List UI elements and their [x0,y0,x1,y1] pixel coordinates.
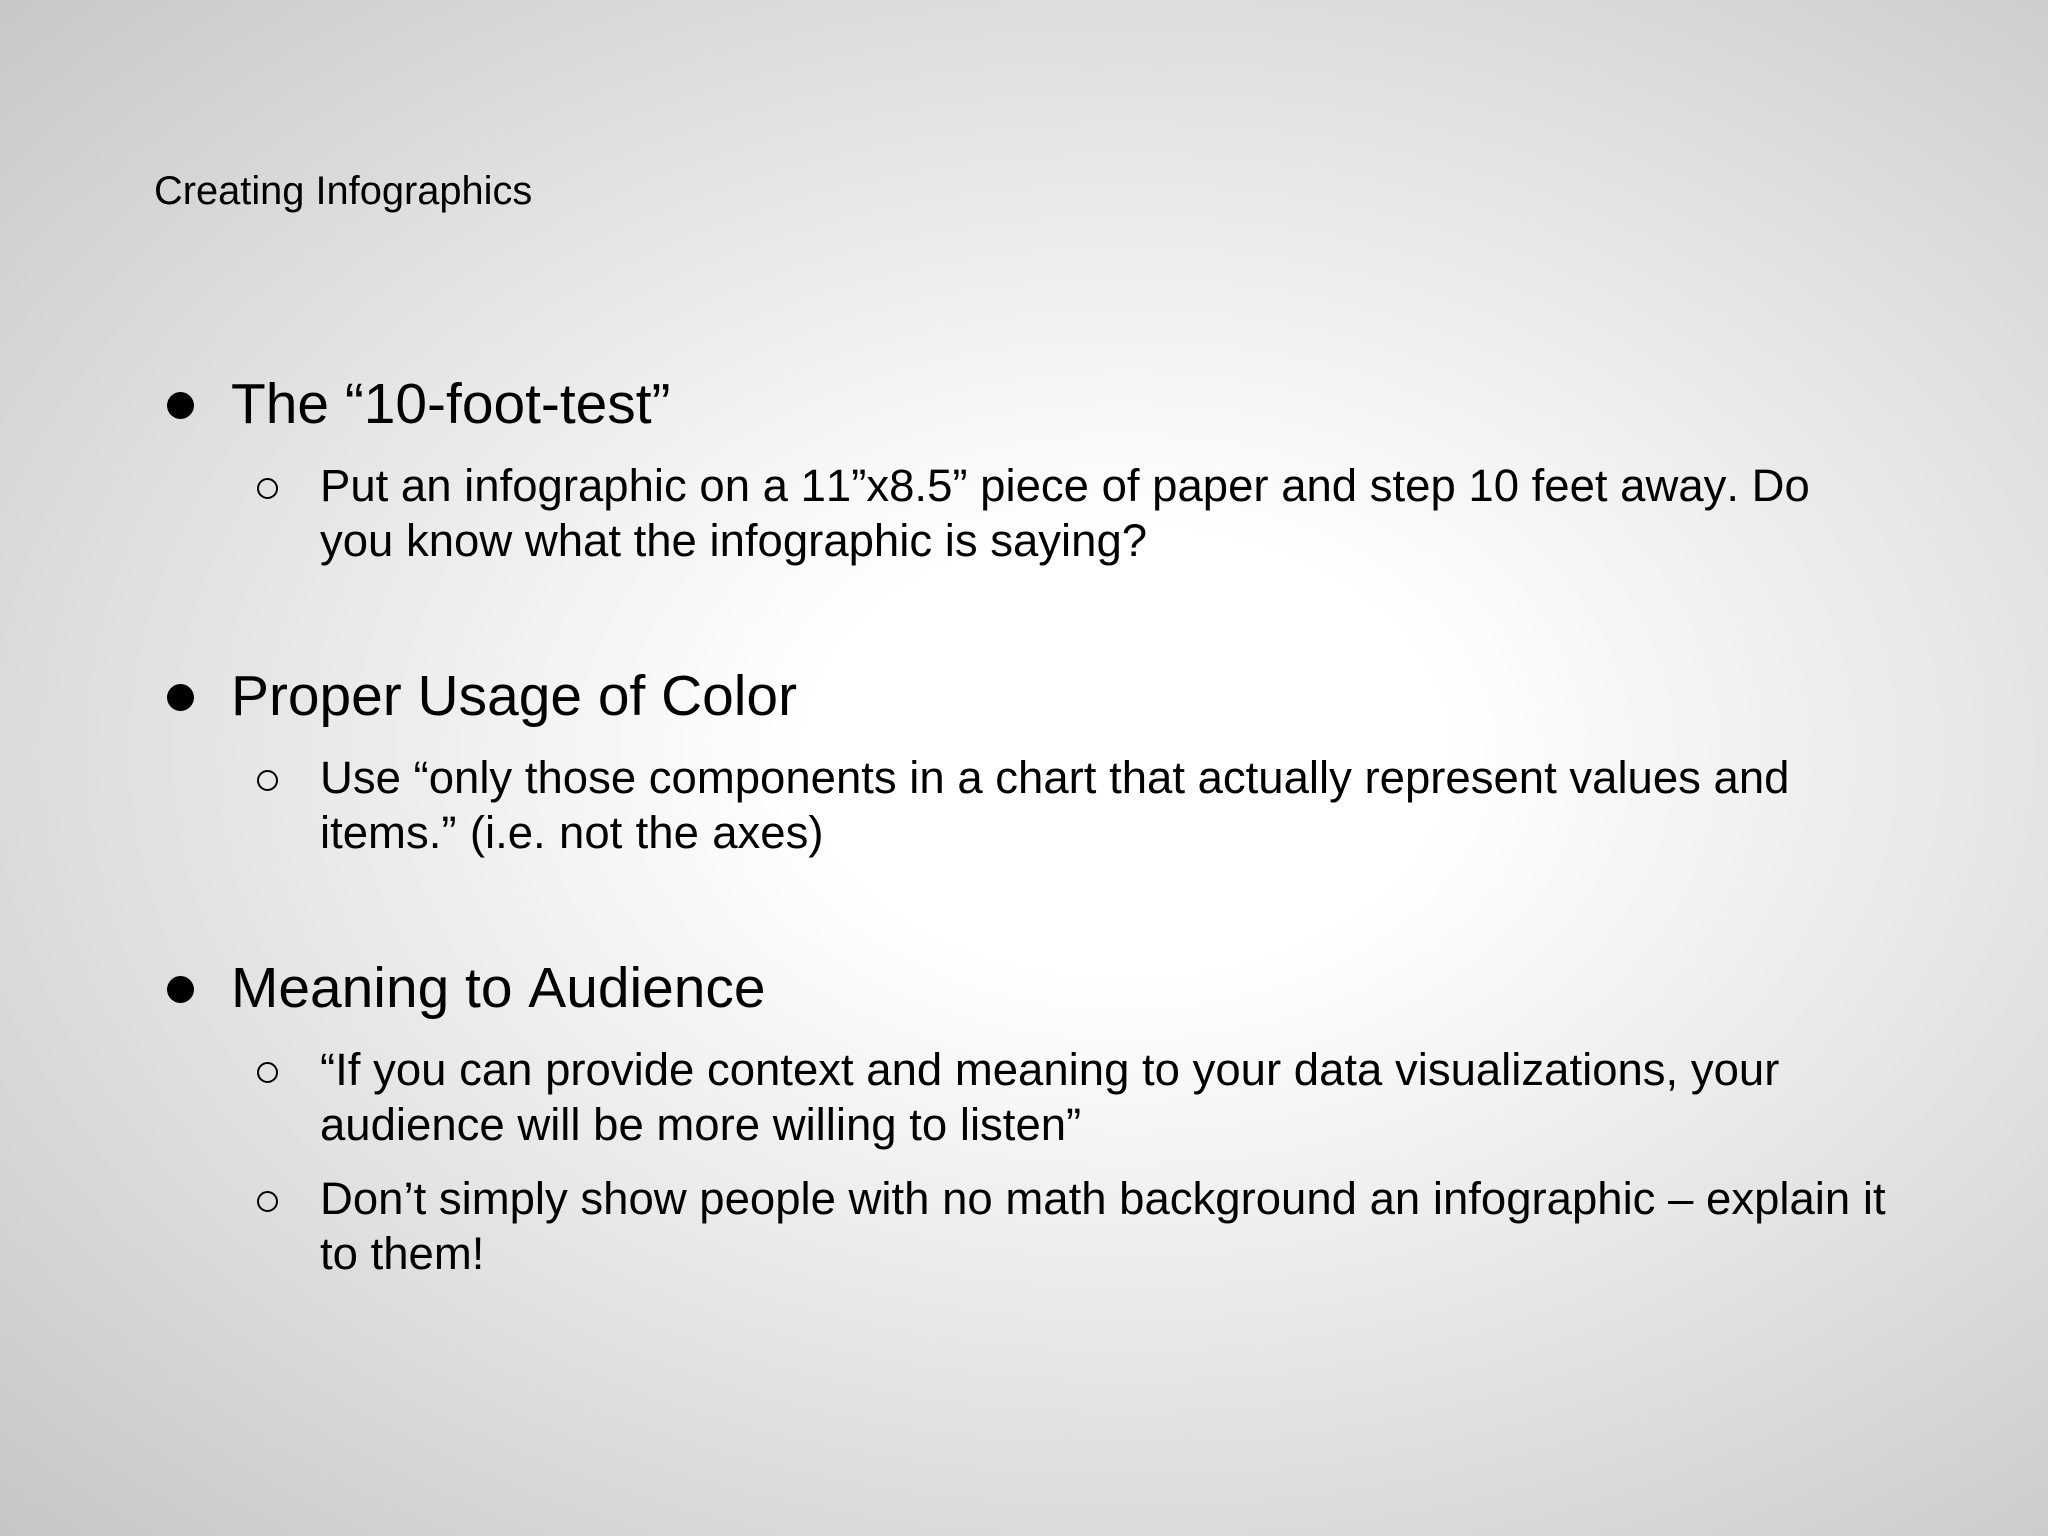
bullet: color [167,684,194,711]
heading: audience: Meaning to Audience [231,956,766,1020]
text block: context: “If you can provide context and meaning to your data visualizations, your [320,1044,1779,1095]
text block: chart components: items.” (i.e. not the axes) [320,807,823,858]
text block: paper test: you know what the infographic is saying? [320,515,1147,566]
text block: chart components [320,752,1789,858]
sub-bullet marker: chart components [256,770,278,790]
text block: paper test: Put an infographic on a 11”x8.5” piece of paper and step 10 feet away. Do [320,460,1810,511]
heading: color: Proper Usage of Color [231,664,797,728]
sub-bullet marker: explain [256,1190,278,1212]
text block: explain: Don’t simply show people with no math background an infographic – explain it [320,1173,1886,1224]
sub-bullet marker: paper test [256,478,278,498]
sub-bullet marker: context [256,1062,278,1082]
section: meaning to audience [167,956,1886,1279]
bullet: 10-foot-test [167,392,194,419]
text block: explain: to them! [320,1228,484,1279]
text block: context [320,1044,1779,1150]
text block: paper test [320,460,1810,566]
title: Creating Infographics [154,169,532,213]
bullet: audience [167,976,194,1003]
heading: 10-foot-test: The “10-foot-test” [231,372,670,436]
text block: context: audience will be more willing to listen” [320,1099,1081,1150]
text block: chart components: Use “only those components in a chart that actually represent values and [320,752,1789,803]
section: proper usage of color [167,664,1789,858]
text block: explain [320,1173,1886,1279]
section: the 10-foot-test [167,372,1810,566]
